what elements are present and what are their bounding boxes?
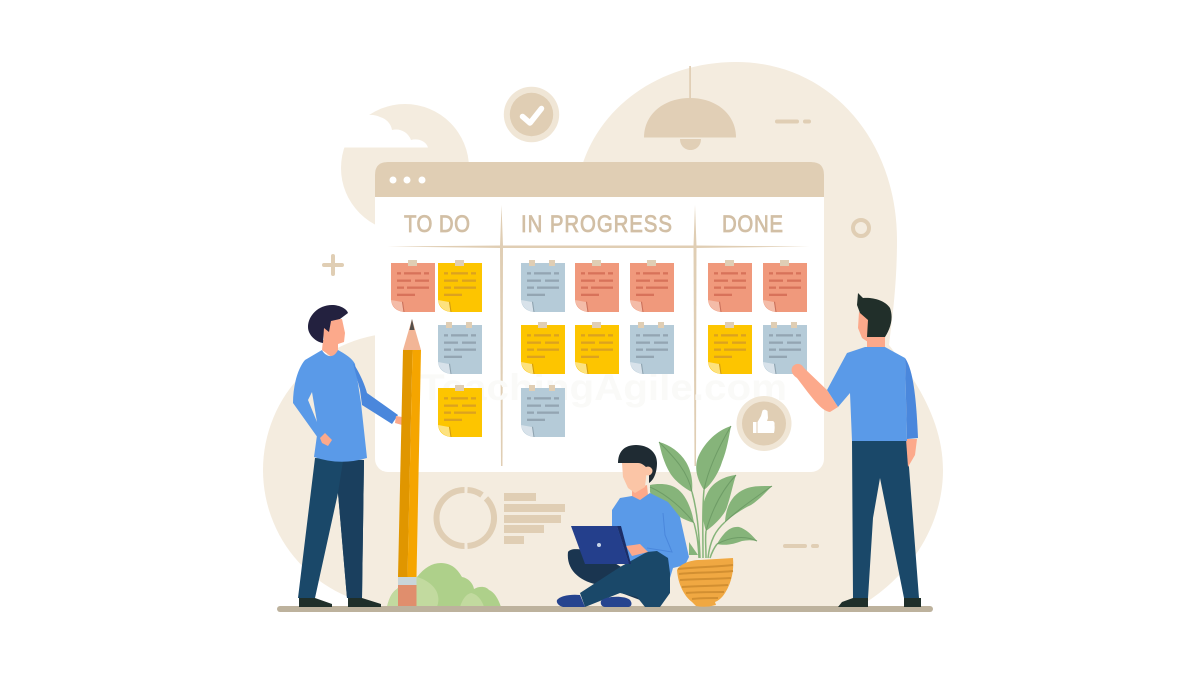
kanban board	[375, 162, 824, 472]
plant leaves	[650, 426, 772, 558]
column dividers	[387, 205, 810, 466]
column heading: done: DONE	[722, 210, 783, 237]
background blobs	[263, 62, 943, 607]
face	[622, 462, 647, 493]
hair	[308, 305, 348, 343]
front foot	[557, 595, 585, 607]
column heading: in progress: IN PROGRESS	[521, 210, 672, 237]
column heading: to do: TO DO	[404, 210, 470, 237]
back leg	[568, 549, 650, 600]
cloud	[330, 115, 428, 148]
bush	[387, 563, 501, 607]
pointing arm	[792, 364, 838, 412]
sweater	[612, 493, 689, 578]
hand	[626, 544, 648, 556]
dash marks top right	[775, 120, 811, 124]
shoes	[838, 598, 921, 607]
lower arm	[906, 439, 917, 467]
leaf	[659, 442, 692, 492]
window dots	[390, 176, 426, 184]
plus decoration	[324, 256, 342, 274]
leaf	[689, 542, 698, 555]
laptop	[571, 526, 629, 564]
person: left man with pencil	[293, 305, 402, 607]
icon: check badge	[504, 87, 559, 142]
donut chart	[437, 490, 494, 546]
face	[858, 312, 870, 342]
neck	[632, 485, 648, 500]
neck	[322, 340, 338, 358]
raised arm	[353, 363, 398, 424]
rear foot	[601, 597, 631, 607]
trousers	[298, 458, 364, 598]
trousers	[852, 441, 919, 598]
leaf	[703, 475, 736, 531]
face	[323, 319, 345, 345]
ground line	[277, 606, 933, 612]
plant pot	[677, 558, 733, 607]
sticky notes: in progress	[521, 260, 674, 437]
neck	[867, 333, 885, 349]
front leg	[580, 551, 670, 607]
pencil	[398, 319, 421, 606]
person: sitting man with laptop	[557, 445, 689, 607]
shoes	[299, 598, 381, 607]
hand on hip	[320, 433, 332, 446]
stems	[692, 490, 725, 558]
sweater	[293, 350, 367, 462]
ear	[644, 466, 652, 476]
dash marks bottom right	[783, 544, 819, 548]
shirt	[827, 347, 907, 441]
hair	[618, 445, 657, 483]
icon: ceiling lamp	[644, 66, 736, 150]
board header bar	[375, 162, 824, 197]
leaf	[725, 486, 772, 522]
bar chart	[504, 493, 565, 544]
watermark: TeachingAgile.com	[420, 367, 787, 408]
sticky notes: to do	[391, 260, 482, 437]
ring decoration	[853, 220, 869, 236]
sticky notes: done	[708, 260, 807, 374]
shirt sleeve	[905, 358, 918, 439]
hair	[857, 293, 892, 337]
leaf	[650, 484, 694, 523]
person: right man pointing	[792, 293, 921, 607]
leaf	[717, 527, 757, 545]
icon: thumbs up badge	[736, 396, 792, 451]
leaf	[696, 426, 731, 490]
